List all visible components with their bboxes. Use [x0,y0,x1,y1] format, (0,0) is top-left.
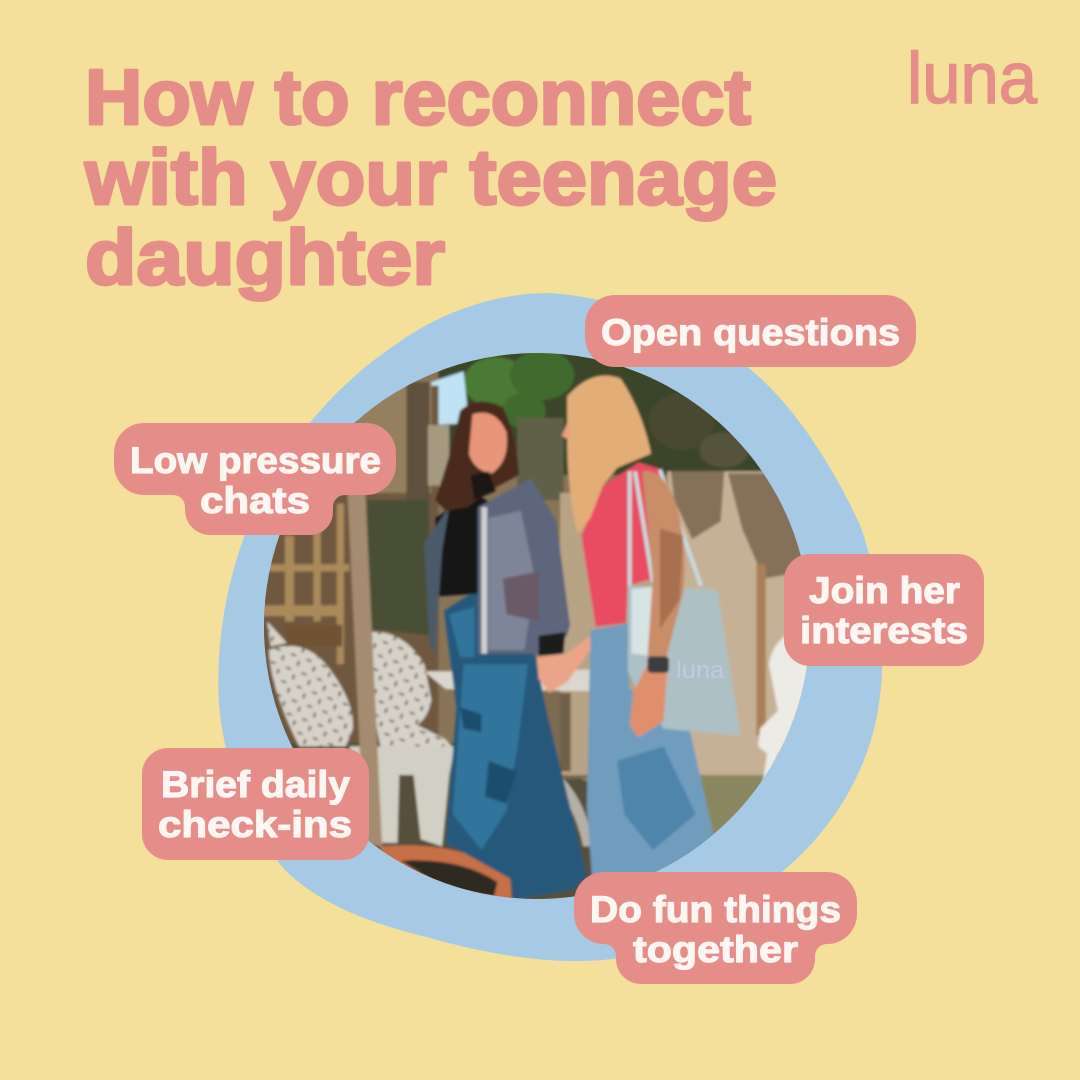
centre fence [517,418,564,500]
title: with your teenage [84,133,777,221]
tree trunk [347,493,382,846]
pill: Low pressure chats: chats [200,480,310,521]
title: daughter [85,213,445,301]
pill: Brief daily check-ins: Brief daily [161,764,350,805]
pill: Brief daily check-ins [142,748,369,860]
pot [378,843,514,898]
bag lettering: luna [676,657,725,684]
pill: Do fun things together: together [633,929,798,970]
woman right: tote bag [628,586,740,736]
woman right: jeans [587,623,714,879]
woman right: arm and hands [642,471,685,661]
photo: mother and daughter holding hands in a garden [260,350,820,910]
chairs [267,621,287,646]
blue blob behind photo [218,293,882,961]
foliage [437,353,762,476]
title: How to reconnect [85,53,751,141]
sky [431,371,469,425]
centre and right fence with shadows [558,491,654,776]
pill: Join her interests [784,554,984,666]
pill: Brief daily check-ins: check-ins [158,804,352,845]
left trellis and posts [260,386,439,743]
pill: Open questions: Open questions [601,312,900,353]
pill: Open questions [585,295,916,367]
pill: Do fun things together [574,872,857,984]
pill: Do fun things together: Do fun things [590,889,841,930]
pill: Low pressure chats [114,423,396,535]
pill: Join her interests: Join her [809,570,960,611]
woman right: hair [567,376,651,534]
title [84,53,777,301]
logo: luna: luna [907,39,1038,119]
ground [290,742,701,899]
woman left: top and jacket [435,493,492,596]
woman left: jeans [444,589,587,900]
woman left: hair and face [435,402,519,511]
woman right: pink top [581,462,662,627]
pill: Low pressure chats: Low pressure [130,440,381,481]
pill: Join her interests: interests [800,610,968,651]
table [424,670,592,691]
